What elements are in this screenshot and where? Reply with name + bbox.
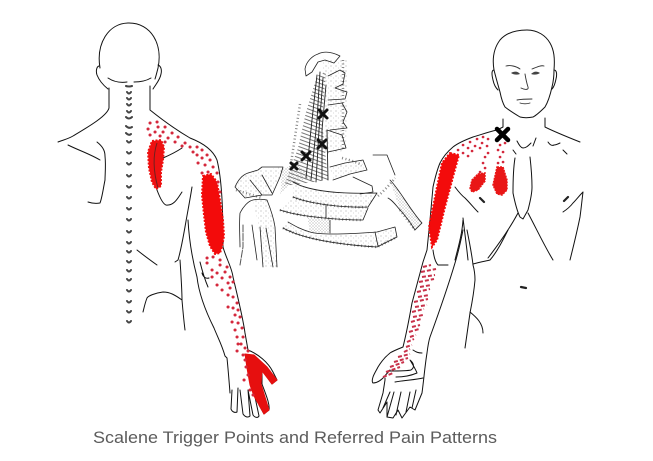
shoulder blade edge line xyxy=(154,143,158,188)
spine markers xyxy=(126,86,132,322)
pain dots: forearm and hand xyxy=(383,265,436,377)
pain: upper arm solid area xyxy=(202,174,224,254)
scalene muscle hatching xyxy=(284,72,328,186)
nipples and navel xyxy=(480,197,568,288)
trigger point X marks xyxy=(291,110,327,169)
eyes xyxy=(511,72,540,75)
caption: Scalene Trigger Points and Referred Pain Patterns xyxy=(93,429,497,447)
pain: chest solid area one xyxy=(470,173,485,192)
face features xyxy=(506,66,544,104)
figure: back view with referred pain xyxy=(58,23,277,417)
back body outline xyxy=(58,23,277,417)
figure: front view with referred pain xyxy=(372,30,583,418)
stippled bone edges xyxy=(236,60,415,247)
pain dots: shoulder and forearm xyxy=(148,122,253,395)
pain: chest solid area two xyxy=(493,167,507,195)
figure: cervical spine and ribs anatomy xyxy=(235,52,422,267)
stippled rib and spine shading xyxy=(235,58,422,267)
dark muscle fibres xyxy=(306,72,328,182)
front body outline xyxy=(372,30,583,418)
bones line art xyxy=(235,52,422,267)
trigger point X mark xyxy=(497,129,508,140)
pain: arm solid area xyxy=(429,153,459,247)
pain dots: shoulder xyxy=(458,137,505,172)
pain: shoulder blade solid area xyxy=(148,140,164,189)
eyebrows, nose and mouth xyxy=(506,66,544,104)
pain: hand solid area xyxy=(245,354,277,414)
